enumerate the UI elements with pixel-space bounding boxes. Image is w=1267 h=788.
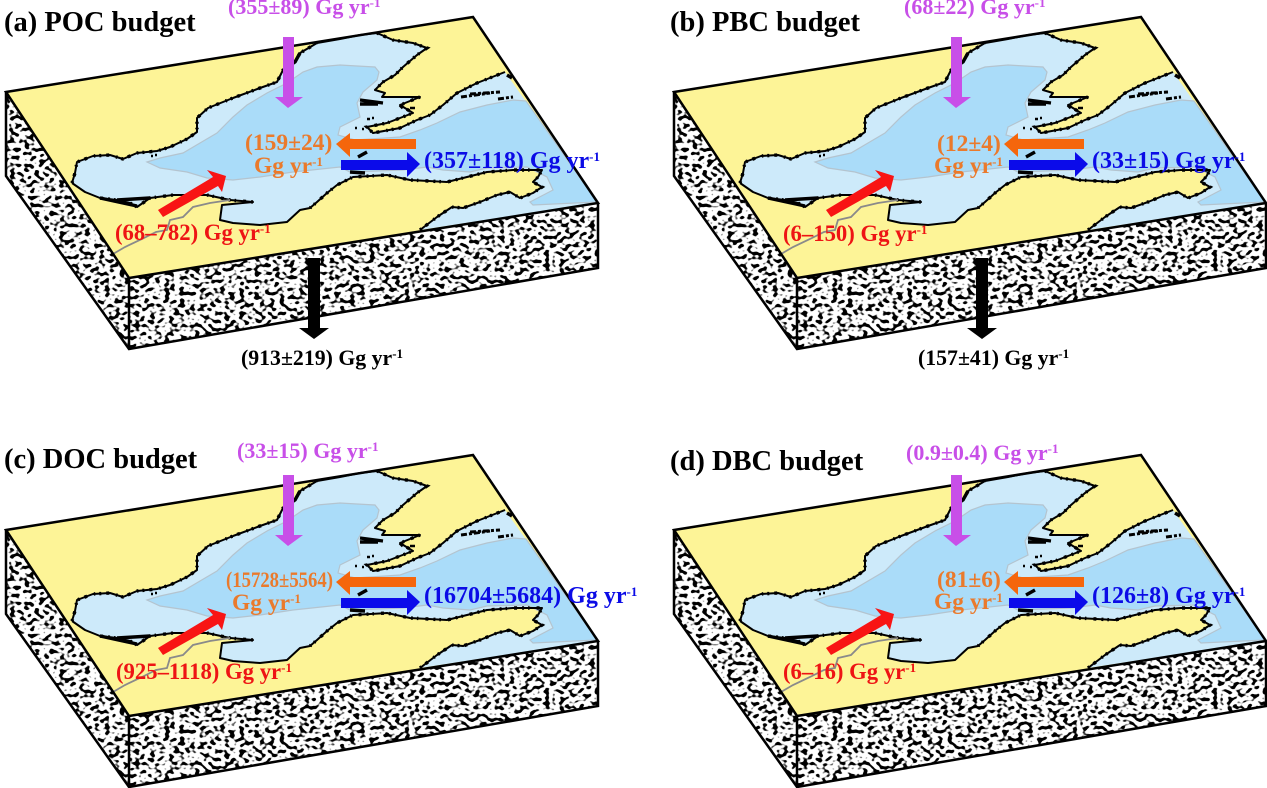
arrow: outflow to sea, orange [1004,133,1084,157]
arrow: outflow to sea, orange [336,133,416,157]
label: blue flux: -1 [626,584,637,599]
arrow: exchange, blue [341,152,420,177]
label: orange flux unit: -1 [312,154,323,169]
label: orange flux value: (15728±5564) [226,567,333,592]
label: river flux: -1 [917,222,927,237]
heading: DBC budget: (d) DBC budget [670,446,864,477]
label: deposition flux: (0.9±0.4) Gg yr [906,440,1048,465]
panel: DOC budget [0,438,637,788]
block diagram: map of sea [0,17,604,355]
heading: DOC budget: (c) DOC budget [4,444,198,475]
panel: DBC budget [668,440,1267,788]
label: orange flux unit: Gg yr [934,153,992,179]
arrow: river input, red [158,170,226,217]
heading: POC budget: (a) POC budget [4,7,196,38]
arrow: outflow to sea, orange [1004,571,1084,595]
arrow: exchange, blue [1009,590,1088,615]
label: deposition flux: -1 [1048,441,1058,456]
arrow: atmospheric deposition [275,37,303,108]
label: blue flux: (33±15) Gg yr [1092,148,1234,174]
label: deposition flux: -1 [368,439,378,454]
label: burial flux: -1 [1058,346,1069,361]
arrow: river input, red [158,608,226,655]
label: blue flux: (357±118) Gg yr [424,148,589,174]
block diagram: map of sea [668,17,1267,355]
label: burial flux: (913±219) Gg yr [241,346,392,370]
label: burial flux: -1 [392,346,403,361]
arrow: river input, red [826,170,894,217]
label: blue flux: -1 [589,149,600,164]
arrow: river input, red [826,608,894,655]
label: blue flux: (126±8) Gg yr [1092,583,1234,609]
panel: PBC budget [668,0,1267,370]
label: river flux: -1 [905,660,916,675]
label: orange flux unit: -1 [992,154,1003,169]
label: orange flux unit: -1 [992,590,1003,605]
arrow: atmospheric deposition [943,475,971,546]
label: deposition flux: (33±15) Gg yr [237,438,368,463]
arrow: burial, black [299,258,329,339]
label: river flux: -1 [281,660,292,675]
block diagram: map of sea [668,455,1267,788]
arrow: exchange, blue [341,590,420,615]
label: river flux: (68–782) Gg yr [115,220,260,245]
label: orange flux unit: Gg yr [254,153,312,179]
label: river flux: -1 [260,221,271,236]
label: orange flux unit: Gg yr [232,590,290,616]
arrow: burial, black [967,258,997,339]
label: blue flux: -1 [1234,149,1245,164]
label: orange flux unit: Gg yr [934,589,992,615]
label: orange flux value: (12±4) [937,131,1001,157]
arrow: atmospheric deposition [275,475,303,546]
label: burial flux: (157±41) Gg yr [918,346,1058,370]
label: river flux: (925–1118) Gg yr [116,659,281,684]
arrow: atmospheric deposition [943,37,971,108]
label: orange flux value: (159±24) [245,130,332,156]
block diagram: map of sea [0,455,604,788]
label: orange flux value: (81±6) [937,567,1001,593]
label: river flux: (6–16) Gg yr [783,659,905,684]
label: blue flux: -1 [1234,584,1245,599]
panel: POC budget [0,0,604,370]
label: orange flux unit: -1 [290,591,301,606]
label: blue flux: (16704±5684) Gg yr [424,583,626,609]
heading: PBC budget: (b) PBC budget [670,7,861,38]
arrow: outflow to sea, orange [336,571,416,595]
label: river flux: (6–150) Gg yr [783,221,917,246]
arrow: exchange, blue [1009,152,1088,177]
